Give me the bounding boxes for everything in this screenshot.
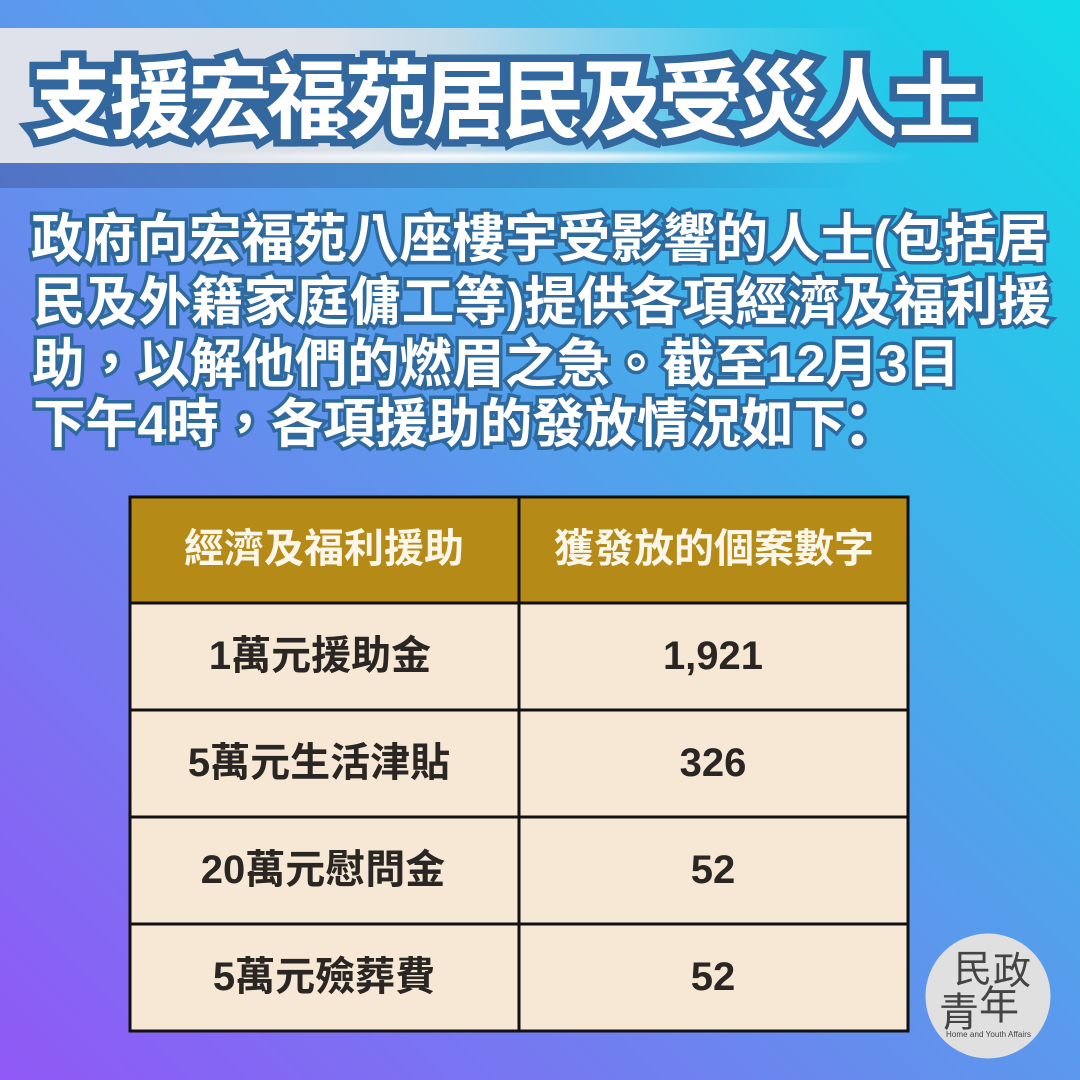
row: living allowance: 326 bbox=[680, 741, 746, 785]
row: funeral expenses bbox=[213, 955, 735, 999]
row: funeral expenses: 5萬元殮葬費 bbox=[213, 955, 435, 999]
row: condolence payment: 20萬元慰問金 bbox=[201, 848, 445, 892]
logo: Home and Youth Affairs: 政 bbox=[993, 940, 1031, 995]
logo: Home and Youth Affairs: 年 bbox=[979, 973, 1019, 1031]
row: living allowance: 5萬元生活津貼 bbox=[188, 741, 450, 785]
intro paragraph: 助，以解他們的燃眉之急。截至12月3日 bbox=[32, 322, 960, 398]
intro paragraph: 下午4時，各項援助的發放情況如下 bbox=[33, 382, 846, 458]
title banner bbox=[0, 28, 902, 188]
header: assistance type: 經濟及福利援助 bbox=[184, 516, 464, 574]
header: number of cases: 獲發放的個案數字 bbox=[554, 516, 874, 574]
intro paragraph: 政府向宏福苑八座樓宇受影響的人士(包括居 bbox=[31, 210, 1049, 269]
table header row bbox=[130, 497, 908, 603]
intro paragraph: 民及外籍家庭傭工等)提供各項經濟及福利援 bbox=[33, 273, 1051, 332]
row: funeral expenses: 52 bbox=[691, 955, 735, 999]
title: 支援宏福苑居民及受災人士 bbox=[31, 31, 979, 156]
row: living allowance bbox=[188, 741, 746, 785]
logo: Home and Youth Affairs bbox=[926, 934, 1050, 1058]
logo: Home and Youth Affairs: 青 bbox=[939, 980, 979, 1038]
table grid bbox=[130, 497, 908, 1031]
intro paragraph bbox=[31, 210, 1051, 463]
assistance table bbox=[130, 497, 908, 1031]
row: emergency grant: 1萬元援助金 bbox=[209, 634, 431, 678]
intro paragraph: ： bbox=[842, 373, 904, 463]
row: condolence payment bbox=[201, 848, 735, 892]
row: emergency grant bbox=[209, 634, 763, 678]
table body rows bbox=[130, 603, 908, 1031]
logo: Home and Youth Affairs: 民 bbox=[954, 938, 992, 993]
logo: Home and Youth Affairs: Home and Youth Affairs bbox=[946, 1030, 1031, 1039]
row: emergency grant: 1,921 bbox=[663, 634, 763, 678]
row: condolence payment: 52 bbox=[691, 848, 735, 892]
